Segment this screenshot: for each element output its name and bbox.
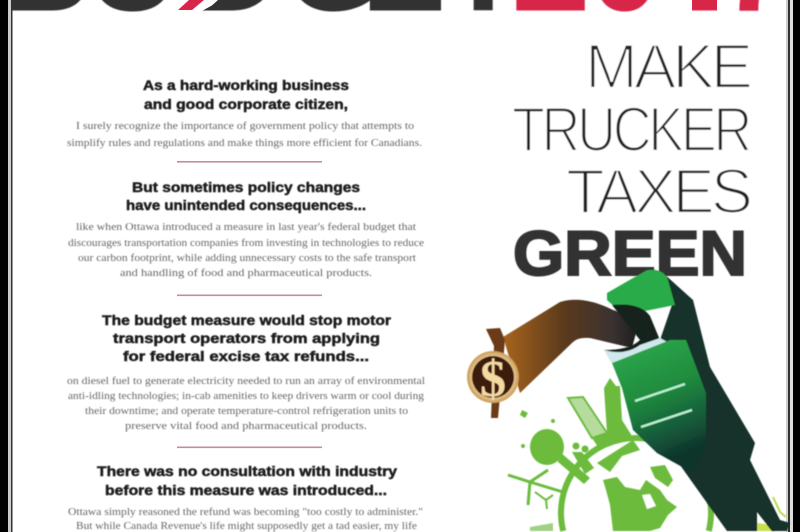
- text block 4: Ottawa simply reasoned the refund was becoming "too costly to administer.": [68, 507, 423, 518]
- text block 2: discourages transportation companies from investing in technologies to reduce: [68, 238, 424, 249]
- text block 3: for federal excise tax refunds...: [123, 348, 369, 364]
- title: make trucker taxes green: GREEN: [513, 219, 747, 289]
- icon: city buildings: [568, 378, 632, 450]
- icon: tree: [530, 429, 590, 484]
- text block 2: and handling of food and pharmaceutical products.: [120, 268, 372, 279]
- text block 4: before this measure was introduced...: [105, 482, 387, 498]
- text block 1: simplify rules and regulations and make things more efficient for Canadians.: [67, 138, 422, 149]
- icon: sprig at lower right: [757, 497, 786, 531]
- text block 2: [68, 179, 424, 279]
- masthead: BUDGET 2017 cropped at top: [0, 0, 792, 40]
- text block 1: and good corporate citizen,: [144, 96, 348, 112]
- text block 3: on diesel fuel to generate electricity needed to run an array of environmental: [67, 376, 425, 387]
- text block 2: like when Ottawa introduced a measure in last year's federal budget that: [76, 222, 416, 233]
- title: make trucker taxes green: TRUCKER: [512, 95, 750, 165]
- illustration: green fuel nozzle: [604, 270, 790, 531]
- text block 1: [67, 77, 422, 149]
- text block 4: [68, 463, 423, 532]
- text block 4: But while Canada Revenue's life might supposedly get a tad easier, my life: [76, 521, 417, 532]
- text block 2: But sometimes policy changes: [132, 179, 360, 195]
- text block 1: As a hard-working business: [143, 77, 349, 93]
- icon: dollar coin: $: [480, 351, 506, 408]
- icon: small building: [530, 523, 553, 531]
- text block 4: There was no consultation with industry: [97, 463, 397, 479]
- title: make trucker taxes green: [512, 32, 751, 289]
- text block 3: preserve vital food and pharmaceutical products.: [125, 421, 367, 432]
- text block 2: our carbon footprint, while adding unnecessary costs to the safe transport: [78, 253, 416, 264]
- illustration: green globe with eco city: [508, 378, 711, 531]
- title: make trucker taxes green: MAKE: [585, 32, 751, 102]
- text block 3: their downtime; and operate temperature-control refrigeration units to: [85, 406, 408, 417]
- text block 3: The budget measure would stop motor: [102, 312, 392, 328]
- title: make trucker taxes green: TAXES: [566, 157, 751, 227]
- illustration: fuel hose: [503, 300, 640, 393]
- text block 2: have unintended consequences...: [126, 197, 366, 213]
- text block 3: [67, 312, 425, 432]
- text block 3: anti-idling technologies; in-cab amenities to keep drivers warm or cool during: [68, 391, 425, 402]
- icon: people: [572, 442, 594, 474]
- text block 3: transport operators from applying: [113, 330, 380, 346]
- text block 1: I surely recognize the importance of government policy that attempts to: [76, 121, 414, 132]
- icon: wind turbines: [508, 470, 563, 509]
- icon: dollar coin: [467, 328, 519, 418]
